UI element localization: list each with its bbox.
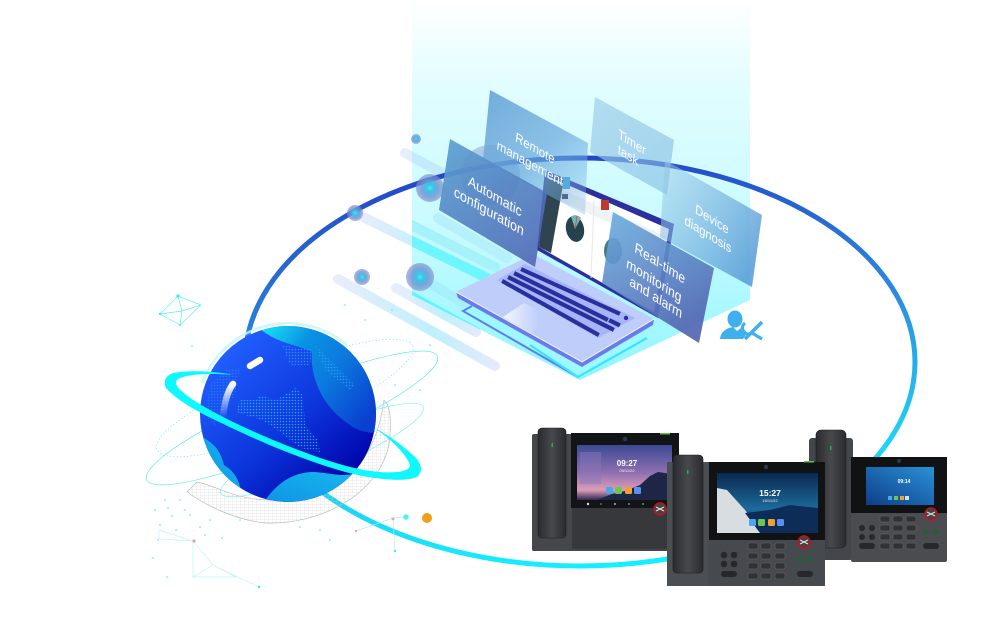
panel: device diagnosis: diagnosis — [684, 212, 732, 256]
diagonal stripes outside beam — [338, 153, 495, 366]
phone: right — [809, 430, 947, 562]
laptop — [456, 170, 674, 378]
panel: timer task — [590, 97, 674, 195]
continent: bottom — [266, 472, 352, 502]
dotted map — [236, 388, 320, 452]
cyan planetary ring — [165, 371, 421, 480]
keyboard — [497, 264, 635, 338]
time label: 15:27 — [759, 488, 781, 498]
wireframe shell under globe — [187, 400, 390, 523]
icon: wireframe crystal — [160, 296, 201, 325]
thin orbit lines — [136, 318, 448, 511]
continent: upper right — [260, 320, 380, 433]
phone: center: 16/11/22 — [762, 498, 778, 503]
phone: center — [667, 455, 825, 586]
panel: automatic configuration — [439, 139, 547, 267]
light beam — [412, 0, 750, 380]
time label: 09:27 — [617, 459, 638, 468]
pulse nodes — [347, 134, 520, 291]
dot: cyan — [403, 514, 409, 520]
icon: technician with tools — [720, 310, 762, 339]
panel: remote management: Remote — [514, 129, 556, 167]
panel: real-time monitoring and alarm — [602, 212, 714, 343]
panel: real-time monitoring and alarm: Real-time — [634, 239, 686, 287]
network decorations and scattered dots — [152, 294, 431, 588]
panel: device diagnosis: Device — [695, 201, 729, 237]
dot: orange — [422, 513, 432, 523]
continent: left — [203, 437, 240, 488]
globe highlights — [250, 360, 260, 366]
laptop shadow outline — [463, 306, 648, 378]
phone: left — [532, 428, 679, 551]
time label: 09:14 — [898, 479, 911, 485]
phone: left: 05/11/22 — [619, 468, 635, 473]
orbit ring — [245, 158, 915, 566]
panel: device diagnosis — [660, 160, 762, 287]
panel: timer task: task — [617, 141, 639, 169]
laptop screen — [537, 170, 674, 318]
diagonal stripes inside beam — [412, 151, 512, 330]
globe — [200, 320, 380, 510]
panel: remote management: management — [496, 137, 564, 189]
touchpad — [503, 303, 554, 333]
panel: automatic configuration: configuration — [453, 183, 525, 239]
panel: timer task: Timer — [618, 126, 647, 159]
panel: real-time monitoring and alarm: monitoring — [625, 254, 683, 306]
panel: real-time monitoring and alarm: and alarm — [629, 272, 683, 322]
panel: remote management — [483, 90, 588, 215]
panel: automatic configuration: Automatic — [467, 172, 523, 220]
